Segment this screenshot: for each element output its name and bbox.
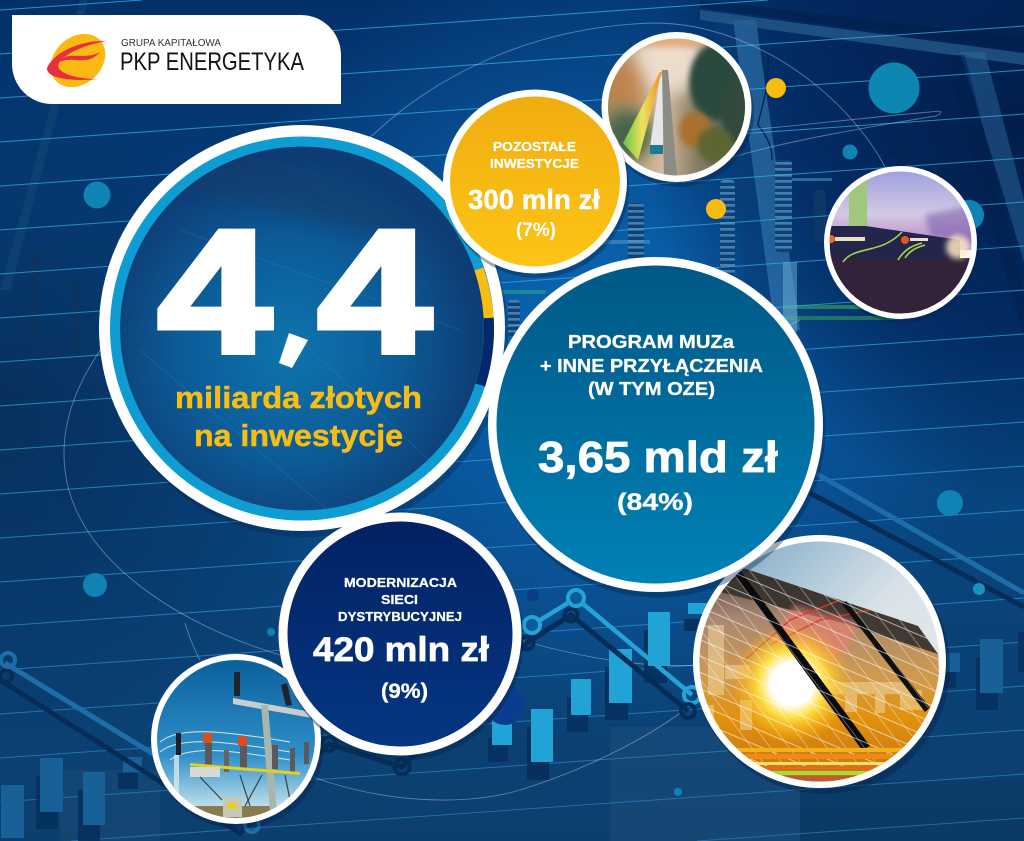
panel: network modernisation xyxy=(278,512,524,760)
logo wordmark: PKP ENERGETYKA xyxy=(120,48,304,76)
amount: 300 mln zł xyxy=(468,184,600,215)
big number: 4 xyxy=(318,195,432,390)
photo: night energy building xyxy=(824,166,979,323)
subtitle xyxy=(175,380,422,453)
label xyxy=(338,575,462,624)
subtitle: miliarda złotych xyxy=(175,380,422,415)
panel: other investments xyxy=(443,90,629,278)
panel: main total 4,4 xyxy=(99,125,508,537)
percentage: (7%) xyxy=(516,220,556,241)
donut segment: network modernisation xyxy=(480,318,489,385)
label xyxy=(540,332,763,399)
amount: 420 mln zł xyxy=(313,631,490,669)
inner disc xyxy=(120,137,484,520)
big number xyxy=(158,195,432,390)
label xyxy=(490,140,579,171)
logo emblem xyxy=(40,23,116,98)
big number: , xyxy=(284,291,301,358)
label: + INNE PRZYŁĄCZENIA xyxy=(540,356,763,376)
subtitle: na inwestycje xyxy=(194,418,403,453)
photo: solar panels xyxy=(690,535,960,794)
percentage: (84%) xyxy=(617,489,693,516)
chart: candlesticks xyxy=(1,603,1024,841)
panel: MUZa program xyxy=(488,257,826,598)
label: PROGRAM MUZa xyxy=(568,332,735,352)
amount: 3,65 mld zł xyxy=(538,433,778,482)
percentage: (9%) xyxy=(381,680,428,703)
label: (W TYM OZE) xyxy=(588,379,715,399)
label: INWESTYCJE xyxy=(490,157,579,171)
label: SIECI xyxy=(381,592,418,607)
photo: train in forest xyxy=(602,30,754,187)
substation structure backdrop xyxy=(0,0,1024,510)
decorative dots xyxy=(83,62,985,796)
label: DYSTRYBUCYJNEJ xyxy=(338,609,462,624)
donut segment: other investments xyxy=(479,269,489,318)
logo wordmark xyxy=(120,38,304,76)
big number: 4 xyxy=(158,195,272,390)
logo wordmark: GRUPA KAPITAŁOWA xyxy=(121,38,221,49)
label: MODERNIZACJA xyxy=(344,575,458,590)
chart: trend line xyxy=(0,470,1024,833)
logo panel xyxy=(12,15,341,104)
photo: electrical substation xyxy=(151,654,324,829)
label: POZOSTAŁE xyxy=(493,140,576,154)
thin arcs xyxy=(64,23,941,800)
